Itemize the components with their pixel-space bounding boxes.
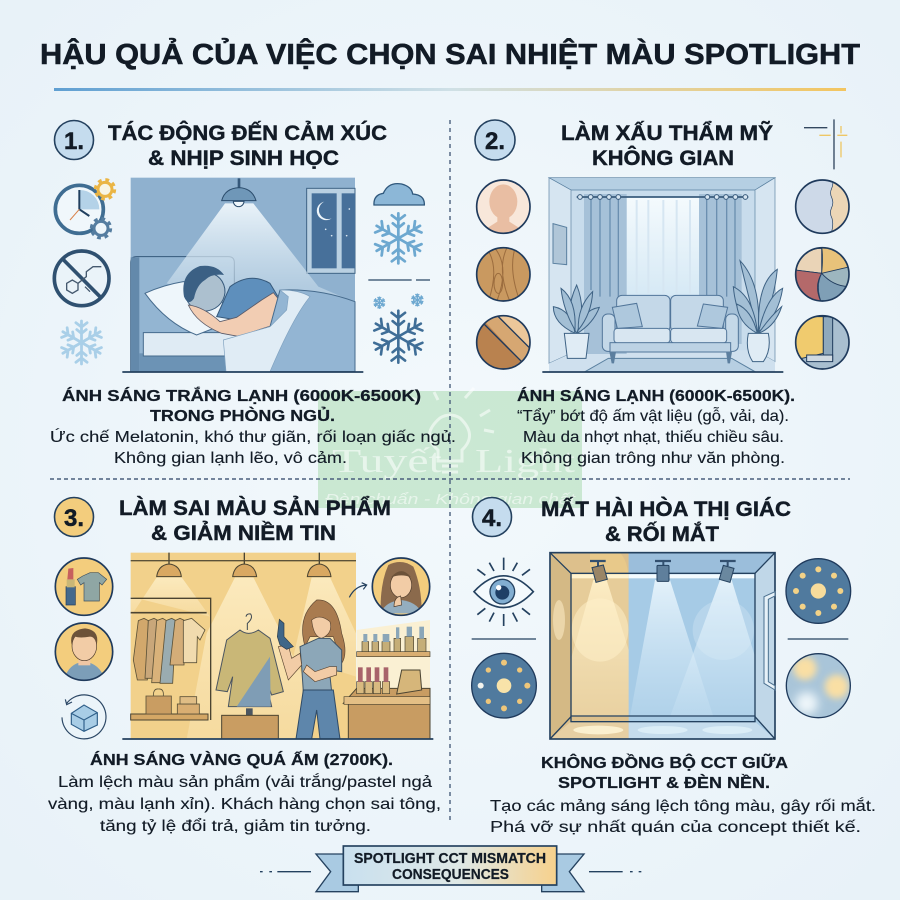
icons: cloud and snowflakes — [368, 184, 430, 363]
number badge 3 — [54, 498, 94, 536]
number badge 1 — [54, 120, 94, 160]
heading 1: TÁC ĐỘNG ĐẾN CẢM XÚC — [108, 120, 387, 145]
body text 1: ÁNH SÁNG TRẮNG LẠNH (6000K-6500K) — [62, 387, 421, 405]
heading 3: & GIẢM NIỀM TIN — [151, 520, 336, 545]
heading 4 — [541, 496, 791, 546]
body text 4: Tạo các mảng sáng lệch tông màu, gây rối mắt. — [490, 796, 876, 815]
footer ribbon banner: CONSEQUENCES — [392, 867, 509, 883]
icons: skin and wood swatches — [477, 180, 533, 369]
illustration: fashion shop under warm light — [122, 553, 433, 739]
body text 3 — [48, 752, 441, 835]
illustration: sleeping man under cold light — [122, 178, 363, 372]
panel 1: emotions and circadian rhythm — [50, 120, 456, 467]
heading 2: KHÔNG GIAN — [592, 145, 734, 170]
heading 3 — [119, 495, 391, 545]
body text 2: “Tẩy” bớt độ ấm vật liệu (gỗ, vải, da). — [517, 406, 789, 425]
icons: customer portraits and return box — [55, 558, 430, 739]
icons: fabric, colour wheel and trim swatches — [795, 178, 853, 369]
watermark logo: Light — [475, 443, 576, 480]
body text 2: ÁNH SÁNG LẠNH (6000K-6500K). — [517, 388, 795, 405]
body text 1: Ức chế Melatonin, khó thư giãn, rối loạn giấc ngủ. — [50, 427, 456, 446]
illustration: cold living room — [542, 178, 783, 372]
body text 4: SPOTLIGHT & ĐÈN NỀN. — [558, 775, 770, 792]
heading 1: & NHỊP SINH HỌC — [148, 146, 339, 170]
decorative sparkle lines — [804, 119, 847, 169]
panel 4: visual disharmony — [472, 496, 876, 836]
watermark logo: Tuyết — [332, 443, 443, 480]
body text 4: KHÔNG ĐỒNG BỘ CCT GIỮA — [541, 754, 788, 772]
number badge 1: 1. — [64, 128, 84, 155]
number badge 4 — [472, 498, 512, 536]
footer ribbon banner — [260, 846, 641, 892]
number badge 2 — [475, 120, 515, 160]
body text 3: tăng tỷ lệ đổi trả, giảm tin tưởng. — [100, 817, 371, 835]
watermark logo: Đèn chuẩn - Không gian chất — [325, 491, 576, 508]
body text 3: vàng, màu lạnh xỉn). Khách hàng chọn sai tông, — [48, 796, 441, 813]
body text 3: Làm lệch màu sản phẩm (vải trắng/pastel ngả — [58, 772, 432, 791]
body text 2 — [517, 388, 795, 467]
heading 2 — [561, 120, 773, 170]
icons: eye and glare dots — [472, 558, 851, 718]
body text 3: ÁNH SÁNG VÀNG QUÁ ẤM (2700K). — [90, 752, 393, 769]
heading 1 — [108, 120, 387, 170]
number badge 4: 4. — [482, 505, 502, 532]
body text 4 — [490, 754, 876, 836]
body text 2: Không gian trông như văn phòng. — [521, 450, 785, 467]
icons: clock, gears and blocked melatonin — [54, 180, 115, 306]
footer ribbon banner: SPOTLIGHT CCT MISMATCH — [354, 851, 546, 867]
illustration: room with mismatched spotlights — [550, 553, 775, 739]
heading 4: MẤT HÀI HÒA THỊ GIÁC — [541, 496, 791, 521]
number badge 3: 3. — [64, 505, 84, 532]
panel 3: wrong product colour — [48, 495, 441, 835]
body text 1: Không gian lạnh lẽo, vô cảm. — [114, 450, 347, 467]
heading 4: & RỐI MẮT — [605, 520, 719, 546]
body text 4: Phá vỡ sự nhất quán của concept thiết kế. — [490, 819, 861, 836]
number badge 2: 2. — [485, 128, 505, 155]
panel 2: spoiled aesthetics — [475, 119, 853, 467]
watermark logo — [318, 388, 582, 508]
title: HẬU QUẢ CỦA VIỆC CHỌN SAI NHIỆT MÀU SPOTLIGHT — [40, 38, 861, 71]
body text 1 — [50, 387, 456, 467]
heading 2: LÀM XẤU THẨM MỸ — [561, 120, 773, 145]
body text 1: TRONG PHÒNG NGỦ. — [150, 407, 335, 425]
heading 3: LÀM SAI MÀU SẢN PHẨM — [119, 495, 391, 520]
body text 2: Màu da nhợt nhạt, thiếu chiều sâu. — [523, 429, 784, 446]
icon: pale snowflake — [60, 321, 103, 364]
